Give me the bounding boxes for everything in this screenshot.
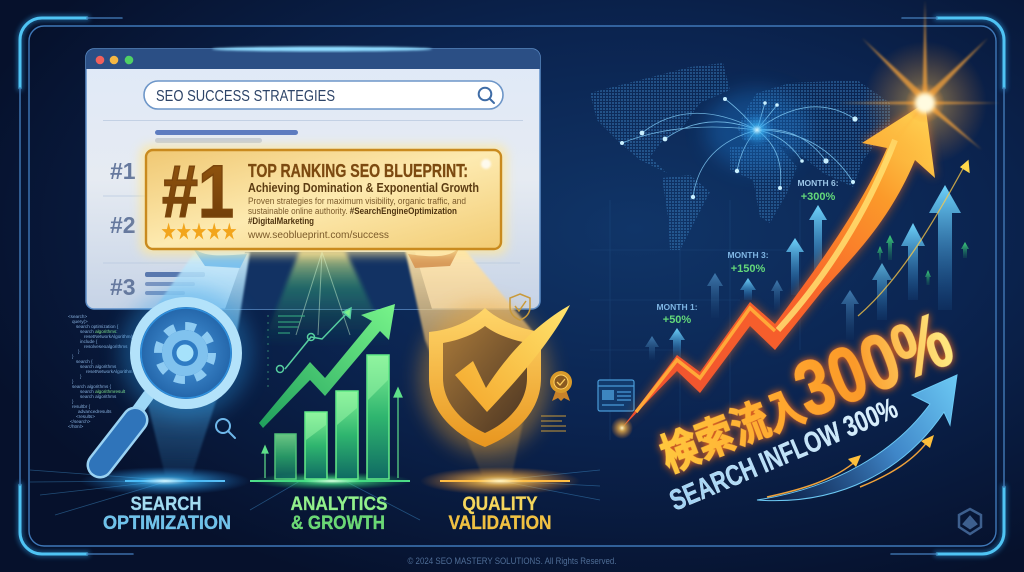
- code snippet: resetNetworkAlgorithm: [86, 369, 133, 374]
- card url: www.seoblueprint.com/success: [247, 229, 389, 241]
- hand: blue: [190, 244, 247, 268]
- code snippet: search optimization {: [76, 324, 119, 329]
- small orange arrow: [767, 460, 857, 497]
- rank number: #1: [162, 150, 234, 233]
- result placeholder bars: [103, 120, 523, 122]
- icon: small shield: [510, 294, 530, 320]
- card title: TOP RANKING SEO BLUEPRINT:: [248, 161, 468, 181]
- check mark: [455, 305, 570, 412]
- month 6 label: MONTH 6:: [797, 178, 839, 188]
- code snippet: search algorithms: [80, 364, 117, 369]
- world map with network: [590, 63, 890, 440]
- magnifier handle: [100, 396, 148, 465]
- bar highlights: [306, 356, 388, 440]
- label: analytics and growth: & GROWTH: [291, 513, 385, 534]
- label: quality validation: [448, 494, 552, 534]
- code snippet: }: [78, 349, 80, 354]
- code snippet: }: [72, 354, 74, 359]
- thin up arrows: [262, 388, 402, 478]
- code snippet: }: [72, 379, 74, 384]
- label: search optimization: SEARCH: [130, 494, 202, 515]
- card description: sustainable online authority. #SearchEngineOptimization: [248, 206, 457, 216]
- code snippet: [68, 314, 137, 429]
- headline: search inflow in English: SEARCH INFLOW 300%: [665, 393, 902, 517]
- growth bar chart: [259, 304, 402, 479]
- arrow start spark: [611, 417, 633, 439]
- network nodes: [620, 97, 858, 199]
- card description: Proven strategies for maximum visibility, organic traffic, and: [248, 196, 466, 206]
- dotted continents: [590, 63, 890, 250]
- logo mark: [959, 509, 981, 534]
- sparkle: [481, 159, 491, 169]
- code snippet: query(>: [72, 319, 88, 324]
- code snippet: search algorithms:: [80, 329, 118, 334]
- blue sweep arrow: [757, 375, 957, 501]
- headline: search inflow in Japanese: [643, 295, 964, 488]
- bars: [275, 355, 389, 479]
- code snippet: </search>: [70, 419, 91, 424]
- faint chart grid: [590, 200, 800, 440]
- icon: shield with check mark: [420, 303, 570, 453]
- month 1 label: [656, 302, 698, 326]
- code snippet: <results>: [76, 414, 95, 419]
- rising orange arrow: [611, 103, 935, 439]
- rank labels: #2: [110, 212, 136, 238]
- browser title bar: [86, 49, 540, 69]
- rank 3 placeholder lines: [145, 272, 205, 295]
- chart side scale: [267, 315, 269, 390]
- growth up arrows: [645, 185, 969, 360]
- icon: search: [479, 88, 494, 103]
- month 3 label: MONTH 3:: [727, 250, 769, 260]
- icon: magnifying glass with gear: [100, 287, 252, 465]
- small orange arrow: [860, 438, 930, 487]
- star rating: ★★★★★: [161, 222, 237, 243]
- starburst at arrow tip: [838, 0, 1000, 165]
- shield body: [429, 308, 541, 447]
- code snippet: <search>: [68, 314, 87, 319]
- code snippet: advancedresults: [78, 409, 112, 414]
- label: search optimization: [103, 494, 231, 534]
- light beams from card: [132, 243, 540, 475]
- label: search optimization: OPTIMIZATION: [103, 513, 231, 534]
- gear: [158, 326, 212, 380]
- month 3 label: +150%: [731, 263, 765, 275]
- ground light streaks: [30, 467, 600, 520]
- code snippet: resetNetworkAlgorithm(w): [84, 334, 137, 339]
- card description: #DigitalMarketing: [248, 216, 314, 226]
- label: quality validation: QUALITY: [462, 494, 538, 515]
- top edge glow: [212, 46, 432, 52]
- line with nodes: [276, 308, 351, 372]
- code snippet: }: [80, 374, 82, 379]
- code snippet: resolveseoalgorithms: [84, 344, 128, 349]
- rank labels: #3: [110, 274, 136, 300]
- label: quality validation: VALIDATION: [448, 513, 552, 534]
- pillar labels: [103, 494, 552, 534]
- beam: blue: [132, 252, 250, 475]
- search bar: SEO SUCCESS STRATEGIES: [156, 88, 335, 105]
- code snippet: search {: [76, 359, 93, 364]
- month 1 label: +50%: [663, 314, 691, 326]
- quality text lines: [541, 416, 566, 431]
- label: analytics and growth: [290, 494, 388, 534]
- code snippet: search algorithms {: [72, 384, 112, 389]
- dark beam opening: [225, 252, 432, 309]
- code snippet: </html>: [68, 424, 84, 429]
- label: analytics and growth: ANALYTICS: [290, 494, 388, 515]
- copyright: © 2024 SEO MASTERY SOLUTIONS. All Rights Reserved.: [408, 556, 616, 566]
- headline: search inflow in Japanese: 300%: [783, 295, 964, 434]
- headline: search inflow in Japanese: 検索流入: [654, 382, 812, 481]
- rank labels: #1: [110, 158, 136, 184]
- card subtitle: Achieving Domination & Exponential Growth: [248, 181, 479, 195]
- beam: gold: [405, 250, 540, 475]
- month labels: [656, 178, 839, 326]
- hand: gold: [408, 243, 462, 268]
- browser window: [86, 46, 540, 309]
- window control dots: [96, 56, 133, 64]
- icon: small magnifier: [216, 419, 235, 438]
- small web page icon: [598, 380, 634, 411]
- code snippet: include {: [80, 339, 98, 344]
- beam: green: [262, 250, 390, 345]
- month 1 label: MONTH 1:: [656, 302, 698, 312]
- gold result card: [140, 145, 507, 255]
- search bar: [144, 81, 503, 109]
- network arcs: [622, 99, 855, 197]
- card description: [248, 196, 466, 226]
- thin gold arrow: [858, 161, 969, 316]
- code snippet: search algorithmresult: [80, 389, 126, 394]
- code snippet: resultbr {: [72, 404, 91, 409]
- code snippet: }: [72, 399, 74, 404]
- green trend arrow: [259, 304, 395, 428]
- icon: award ribbon: [550, 371, 572, 401]
- month 3 label: [727, 250, 769, 275]
- month 6 label: +300%: [801, 191, 835, 203]
- rank labels: [110, 158, 136, 300]
- month 6 label: [797, 178, 839, 203]
- code snippet: search algorithms: [80, 394, 117, 399]
